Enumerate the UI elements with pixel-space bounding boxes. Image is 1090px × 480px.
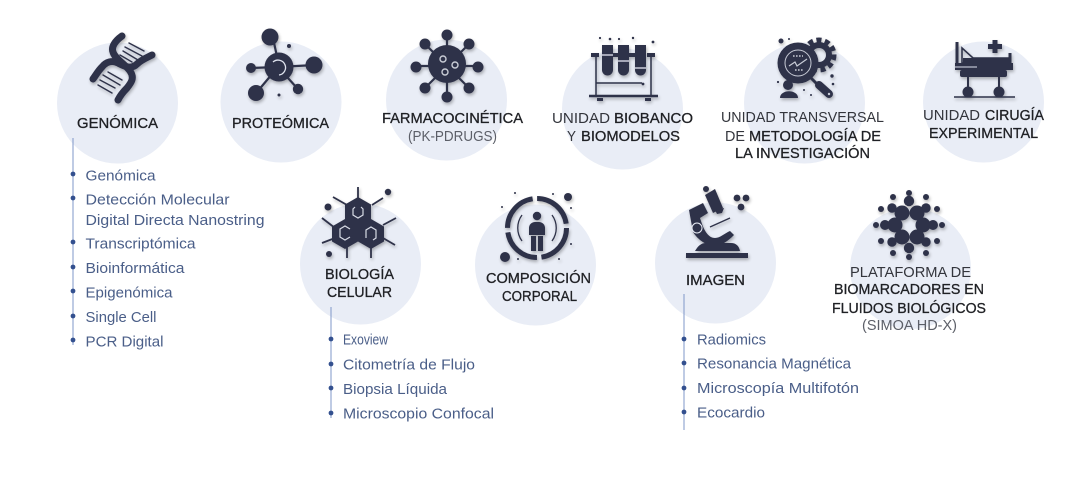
heading: biobanco: UNIDAD (552, 110, 610, 127)
background circle: imagen (655, 202, 776, 324)
heading: cirugía: CIRUGÍA (985, 107, 1044, 124)
list: genómica: Bioinformática (86, 261, 186, 277)
background circle: biomarcadores (850, 208, 971, 329)
subheading: PK-PDRUGS: (PK-PDRUGS) (408, 128, 497, 145)
icon: hexagon molecules (322, 187, 396, 258)
heading: farmacocinética: FARMACOCINÉTICA (382, 110, 523, 127)
heading: biomarcadores: PLATAFORMA DE (850, 264, 971, 281)
panel: proteómica (220, 28, 342, 162)
list: genómica (71, 138, 264, 350)
list: imagen: Ecocardio (697, 406, 765, 422)
heading: imagen: IMAGEN (686, 272, 745, 289)
background circle: composición corporal (475, 204, 596, 326)
background circle: cirugía (923, 42, 1044, 162)
list: genómica: Epigenómica (86, 286, 173, 302)
list: imagen: Radiomics (697, 332, 766, 348)
heading: biomarcadores: (SIMOA HD-X) (862, 317, 957, 334)
panel: genómica (57, 36, 178, 164)
list: genómica: Digital Directa Nanostring (86, 213, 264, 229)
heading: biobanco (552, 110, 693, 145)
heading: biomarcadores: FLUIDOS BIOLÓGICOS (832, 300, 986, 317)
icon: DNA (93, 36, 152, 100)
panel: composición corporal (475, 192, 596, 326)
list: biología celular: Exoview (343, 332, 388, 348)
heading: biología celular: CELULAR (327, 284, 392, 301)
list: imagen (682, 294, 859, 430)
heading: biomarcadores: BIOMARCADORES EN (834, 281, 984, 298)
heading: genómica: GENÓMICA (77, 115, 158, 132)
panel: farmacocinética (382, 30, 523, 160)
list: genómica: Single Cell (86, 310, 156, 326)
panel: biomarcadores (832, 190, 986, 334)
icon: body in ring (500, 192, 572, 262)
icon: molecule network (246, 28, 322, 101)
panel: metodología (721, 38, 884, 164)
background circle: metodología (744, 42, 865, 164)
background circle: biología celular (300, 204, 421, 324)
icon: microscope (686, 186, 749, 258)
heading: biobanco: Y (567, 128, 576, 145)
heading: metodología: LA INVESTIGACIÓN (735, 145, 870, 162)
heading: cirugía: UNIDAD (923, 107, 980, 124)
heading: metodología: UNIDAD TRANSVERSAL (721, 109, 884, 126)
heading: biología celular (325, 266, 394, 301)
panel: biobanco (552, 37, 693, 169)
heading: cirugía (923, 107, 1044, 142)
list: imagen: Resonancia Magnética (697, 356, 852, 372)
background circle: biobanco (562, 48, 683, 170)
heading: metodología: DE (725, 128, 745, 145)
panel: biología celular (300, 187, 421, 324)
list: genómica: Detección Molecular (86, 192, 230, 208)
panel: imagen (655, 186, 776, 324)
panel: cirugía (923, 40, 1044, 162)
heading: biomarcadores (832, 264, 986, 334)
heading: metodología: METODOLOGÍA DE (749, 128, 881, 145)
list: genómica: Transcriptómica (86, 236, 196, 252)
background circle: farmacocinética (386, 40, 507, 160)
list: biología celular: Biopsia Líquida (343, 382, 448, 398)
icon: magnifier with gear and person (777, 38, 834, 98)
list: imagen: Microscopía Multifotón (697, 381, 859, 397)
icon: virus (410, 30, 484, 102)
list: genómica: Genómica (86, 168, 156, 184)
background circle: genómica (57, 42, 178, 164)
heading: cirugía: EXPERIMENTAL (929, 125, 1038, 142)
heading: biobanco: BIOBANCO (614, 110, 693, 127)
heading: metodología (721, 109, 884, 162)
heading: proteómica: PROTEÓMICA (232, 115, 329, 132)
background circle: proteómica (220, 42, 342, 162)
heading: composición corporal: COMPOSICIÓN (486, 270, 591, 287)
list: biología celular: Citometría de Flujo (343, 358, 475, 374)
list: biología celular (329, 307, 494, 422)
icon: test tubes (589, 37, 658, 101)
heading: composición corporal (486, 270, 591, 305)
icon: biomarker cluster (873, 190, 945, 260)
heading: biología celular: BIOLOGÍA (325, 266, 394, 283)
icon: operating bed (954, 40, 1015, 98)
list: genómica: PCR Digital (86, 334, 164, 350)
list: biología celular: Microscopio Confocal (343, 406, 494, 422)
heading: biobanco: BIOMODELOS (581, 128, 680, 145)
heading: composición corporal: CORPORAL (502, 288, 577, 305)
